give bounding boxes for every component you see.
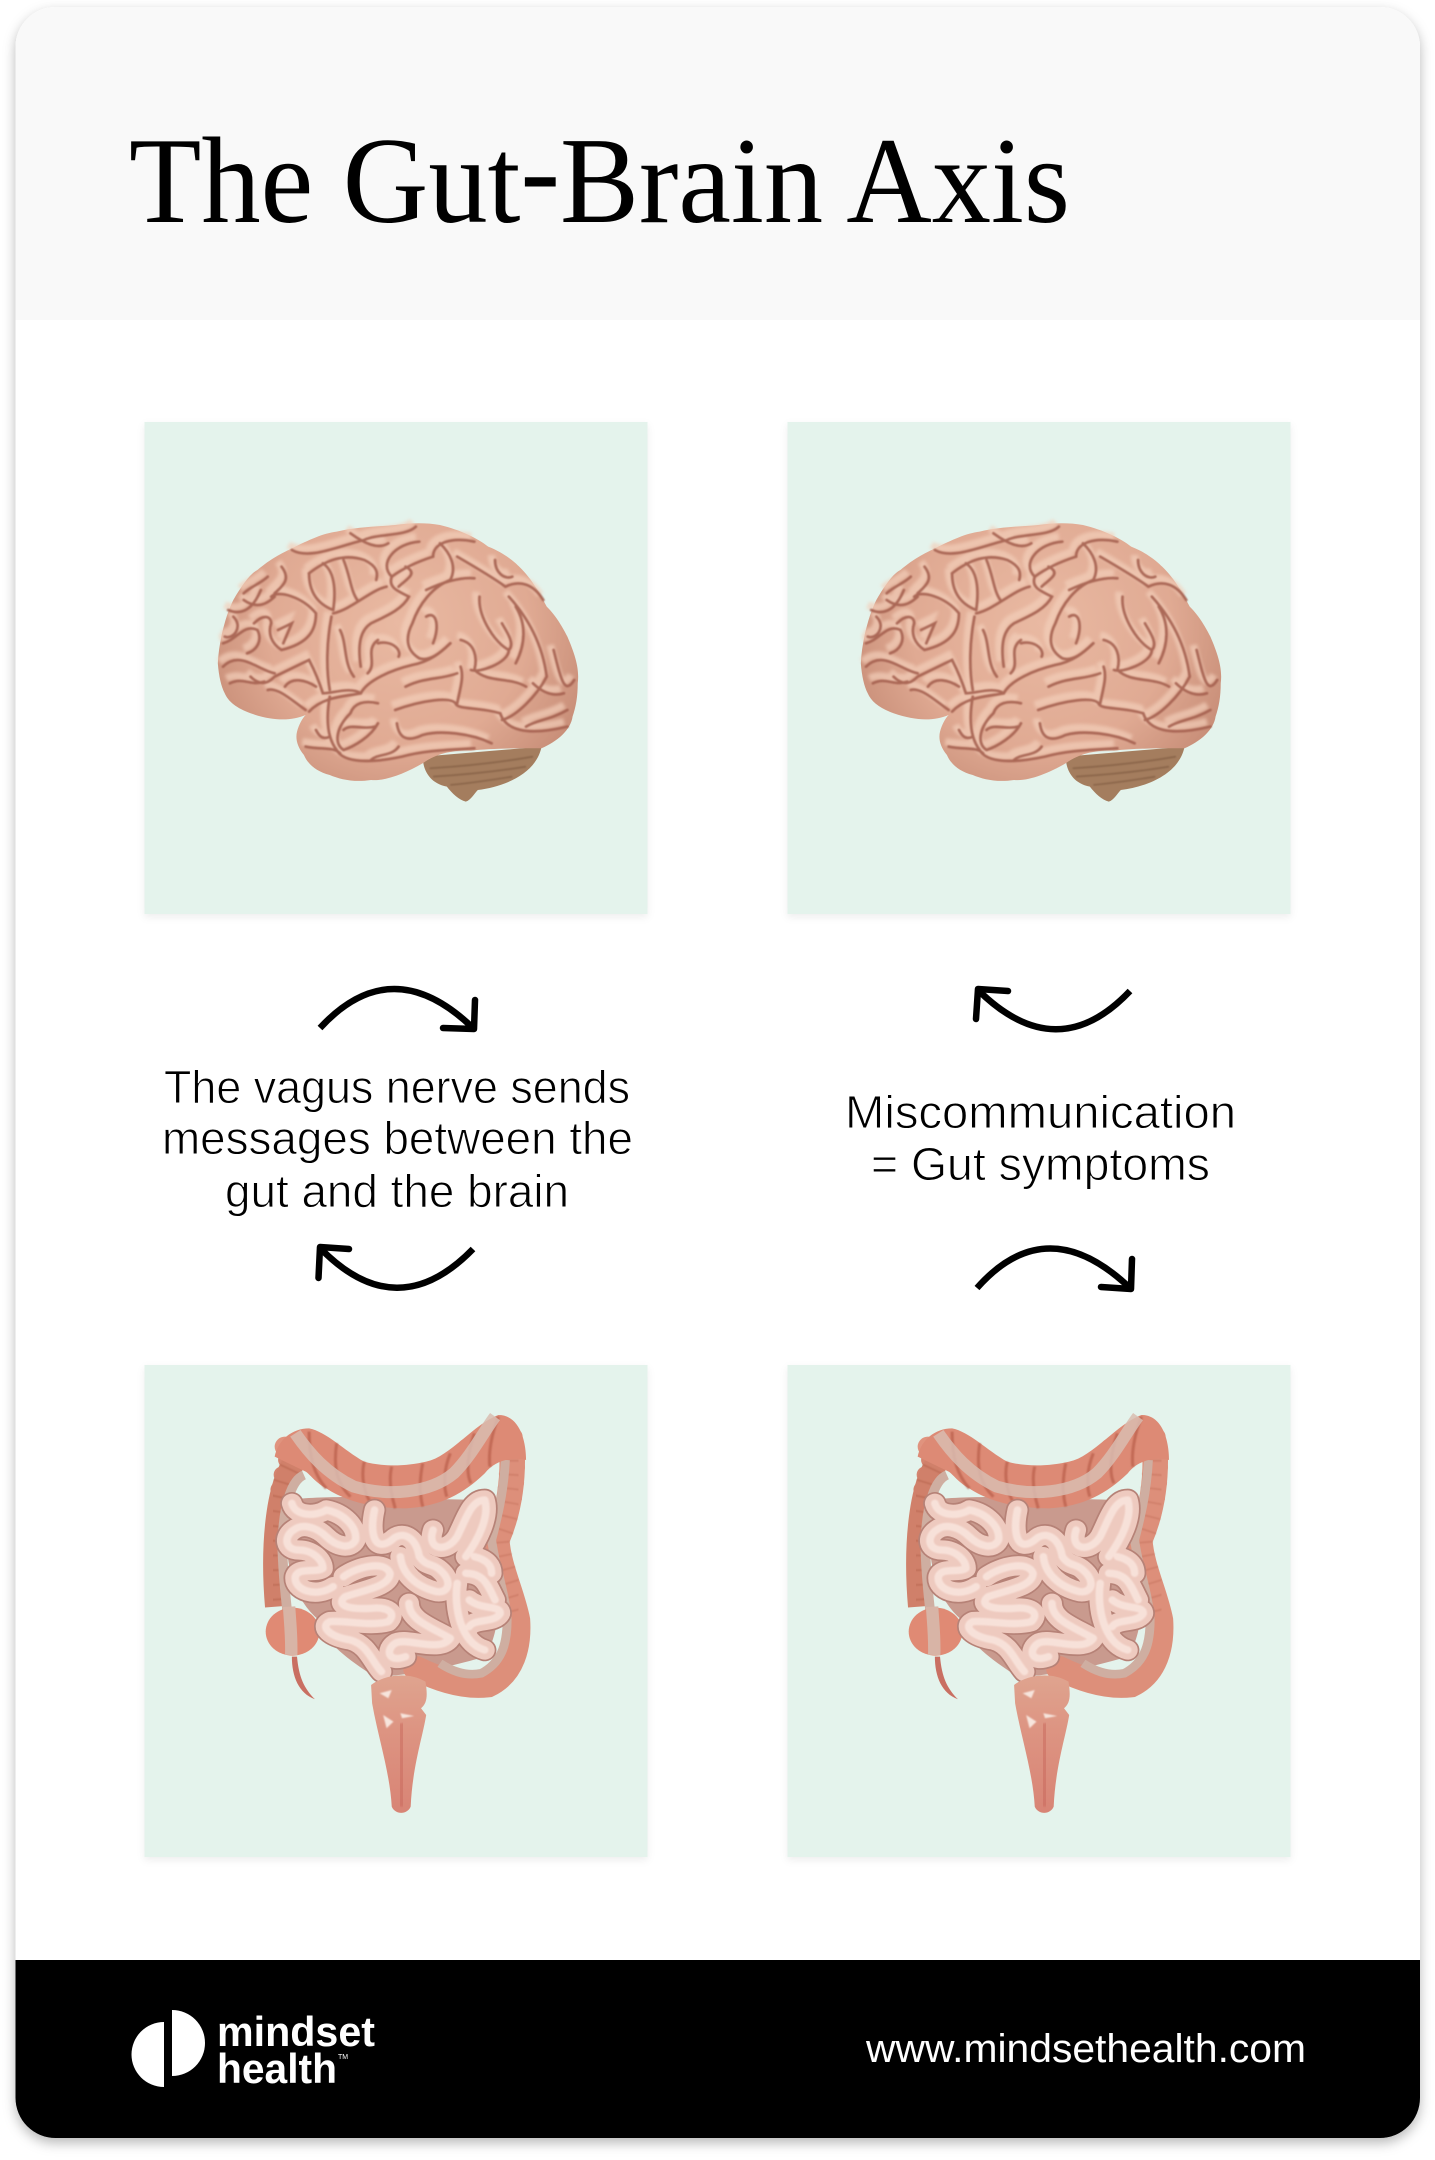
title: The Gut bbox=[129, 112, 535, 249]
text: vagus nerve bbox=[162, 1061, 633, 1217]
website url: www.mindsethealth.com bbox=[865, 2027, 1306, 2071]
panel: gut right bbox=[788, 1365, 1290, 1857]
text: vagus nerve: The vagus nerve sends bbox=[164, 1061, 630, 1113]
logo wordmark bbox=[217, 2008, 375, 2092]
logo bbox=[132, 2008, 375, 2092]
panel: brain right bbox=[788, 422, 1290, 914]
text: miscommunication bbox=[845, 1086, 1236, 1190]
arrow: right top bbox=[976, 989, 1130, 1029]
icon: intestines left bbox=[266, 1415, 526, 1813]
icon: logo mark bbox=[132, 2010, 205, 2087]
logo wordmark: mindset bbox=[217, 2008, 375, 2055]
icon: intestines right bbox=[909, 1415, 1169, 1813]
logo wordmark: TM bbox=[338, 2054, 348, 2061]
text: vagus nerve: gut and the brain bbox=[225, 1165, 569, 1217]
arrow: left bottom bbox=[318, 1247, 473, 1288]
text: miscommunication: = Gut symptoms bbox=[871, 1138, 1210, 1190]
footer band bbox=[16, 1960, 1420, 2138]
text: vagus nerve: messages between the bbox=[162, 1112, 633, 1164]
icon: brain left bbox=[218, 522, 578, 802]
title: Brain Axis bbox=[560, 112, 1070, 249]
arrow: left top bbox=[320, 989, 475, 1029]
icon: brain right bbox=[861, 522, 1221, 802]
panel: gut left bbox=[144, 1365, 648, 1857]
panel: brain left bbox=[144, 422, 648, 914]
logo wordmark: health bbox=[217, 2045, 337, 2092]
text: miscommunication: Miscommunication bbox=[845, 1086, 1236, 1138]
title: - bbox=[520, 101, 560, 238]
arrow: right bottom bbox=[977, 1248, 1132, 1289]
header band bbox=[16, 7, 1420, 320]
